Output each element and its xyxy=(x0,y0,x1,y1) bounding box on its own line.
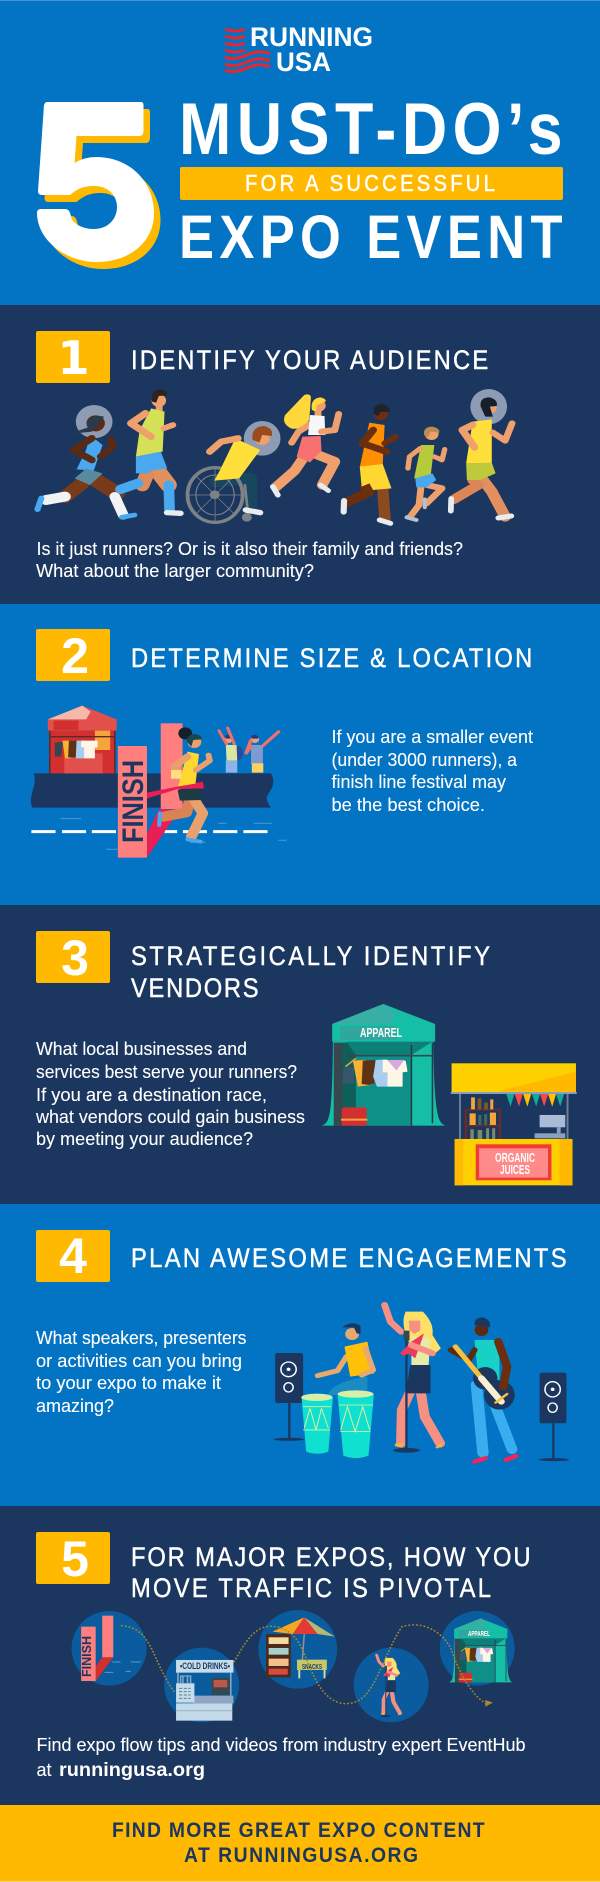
number badge 1: 1 xyxy=(57,331,90,385)
illustration: apparel tent: APPAREL xyxy=(360,1025,402,1040)
rear finish post xyxy=(161,723,183,809)
logo wordmark line 1: RUNNING xyxy=(250,22,373,52)
stop labels: APPAREL xyxy=(468,1629,490,1638)
big numeral 5 xyxy=(37,102,160,269)
heading: MOVE TRAFFIC IS PIVOTAL xyxy=(131,1574,491,1603)
stop labels: SNACKS xyxy=(302,1664,322,1671)
illustration: runners xyxy=(38,389,512,523)
drummer xyxy=(318,1323,374,1397)
right speaker xyxy=(538,1373,569,1461)
body text: services best serve your runners? xyxy=(36,1062,297,1082)
body text: amazing? xyxy=(36,1396,114,1416)
footer text line 1: FIND MORE GREAT EXPO CONTENT xyxy=(112,1818,485,1842)
number badge 4: 4 xyxy=(59,1228,87,1284)
body text xyxy=(35,1039,305,1149)
heading: IDENTIFY YOUR AUDIENCE xyxy=(131,346,488,375)
body text: What about the larger community? xyxy=(36,561,314,581)
drums xyxy=(301,1390,374,1458)
subtitle bar: FOR A SUCCESSFUL xyxy=(245,170,495,196)
finish sign text: FINISH xyxy=(117,760,150,843)
body text xyxy=(36,1328,246,1416)
ribbon xyxy=(147,782,204,858)
body text: What speakers, presenters xyxy=(36,1328,246,1348)
number badge 2 xyxy=(36,628,110,684)
runner: man in green tank xyxy=(121,389,181,513)
illustration: juice stand: ORGANIC xyxy=(495,1150,535,1165)
subtitle bar xyxy=(180,167,563,200)
panel: step 5 traffic flow xyxy=(0,1506,600,1805)
body text: Find expo flow tips and videos from industry expert EventHub xyxy=(36,1735,526,1755)
front finish post xyxy=(118,746,147,858)
body text: finish line festival may xyxy=(332,772,506,792)
body text: If you are a destination race, xyxy=(36,1085,267,1105)
panel: header xyxy=(0,0,600,305)
guitarist xyxy=(451,1317,516,1462)
runner crossing finish xyxy=(159,727,210,842)
stop: snacks xyxy=(266,1617,335,1678)
number badge 2: 2 xyxy=(61,628,89,684)
singer xyxy=(385,1305,443,1453)
heading: FOR MAJOR EXPOS, HOW YOU xyxy=(131,1543,531,1572)
icon: logo stripes xyxy=(225,29,270,72)
heading: DETERMINE SIZE & LOCATION xyxy=(131,644,532,673)
runner: bearded man in yellow xyxy=(451,389,512,518)
wheelchair athlete xyxy=(188,421,281,522)
runner: child xyxy=(407,427,445,520)
runner: woman in blue xyxy=(38,405,135,517)
runner: blonde woman xyxy=(273,394,339,495)
stop: apparel tent xyxy=(449,1618,513,1682)
number badge 4 xyxy=(36,1228,110,1284)
body text: runningusa.org xyxy=(59,1760,205,1781)
title line: must-do's: MUST-DO’s xyxy=(179,89,563,170)
illustration: juice stand xyxy=(451,1063,577,1185)
runner: man in orange xyxy=(344,404,396,523)
number badge 3 xyxy=(36,930,110,986)
body text: be the best choice. xyxy=(332,795,485,815)
body text: or activities can you bring xyxy=(36,1351,242,1371)
logo: Running USA xyxy=(225,22,373,77)
body text: to your expo to make it xyxy=(36,1373,221,1393)
number badge 3: 3 xyxy=(61,930,89,986)
stop: cold drinks xyxy=(176,1660,233,1721)
illustration: apparel tent xyxy=(321,1004,446,1126)
stop labels: FINISH xyxy=(79,1636,94,1677)
heading xyxy=(131,942,490,1003)
body text: (under 3000 runners), a xyxy=(332,750,518,770)
illustration: finish line xyxy=(31,706,287,858)
number badge 1 xyxy=(36,331,110,385)
body text: What local businesses and xyxy=(36,1039,247,1059)
stop labels: •COLD DRINKS• xyxy=(180,1661,230,1671)
body text xyxy=(332,727,533,815)
road and barrier xyxy=(31,773,287,849)
stop labels xyxy=(79,1629,490,1677)
vendor tent xyxy=(48,706,117,773)
heading: STRATEGICALLY IDENTIFY xyxy=(131,942,490,971)
illustration: band xyxy=(274,1305,569,1462)
panel: step 2 determine size and location xyxy=(0,604,600,905)
body text: by meeting your audience? xyxy=(36,1129,253,1149)
dotted path with arrow xyxy=(122,1625,493,1707)
logo wordmark line 2: USA xyxy=(276,47,331,77)
panel: step 3 strategically identify vendors xyxy=(0,905,600,1204)
stop: singer xyxy=(377,1655,401,1717)
panel: step 1 identify your audience xyxy=(0,305,600,604)
heading: PLAN AWESOME ENGAGEMENTS xyxy=(131,1244,567,1273)
heading: VENDORS xyxy=(131,974,259,1003)
left speaker xyxy=(274,1353,304,1441)
illustration: juice stand: JUICES xyxy=(500,1162,530,1177)
body text: Is it just runners? Or is it also their family and friends? xyxy=(36,539,463,559)
body text: at xyxy=(36,1760,52,1780)
spectators xyxy=(219,728,279,773)
body text: If you are a smaller event xyxy=(332,727,533,747)
heading xyxy=(131,1543,531,1603)
illustration: expo flow xyxy=(72,1610,515,1722)
body text xyxy=(36,539,463,581)
title line: expo event: EXPO EVENT xyxy=(179,203,563,272)
number badge 5: 5 xyxy=(61,1531,89,1587)
footer text line 2: AT RUNNINGUSA.ORG xyxy=(184,1843,418,1867)
panel: footer call to action xyxy=(0,1805,600,1882)
panel: step 4 plan awesome engagements xyxy=(0,1204,600,1506)
body text: what vendors could gain business xyxy=(35,1107,305,1127)
body text xyxy=(36,1735,526,1781)
stop circles xyxy=(72,1610,515,1722)
number badge 5 xyxy=(36,1531,110,1587)
stop: finish line xyxy=(81,1616,141,1681)
